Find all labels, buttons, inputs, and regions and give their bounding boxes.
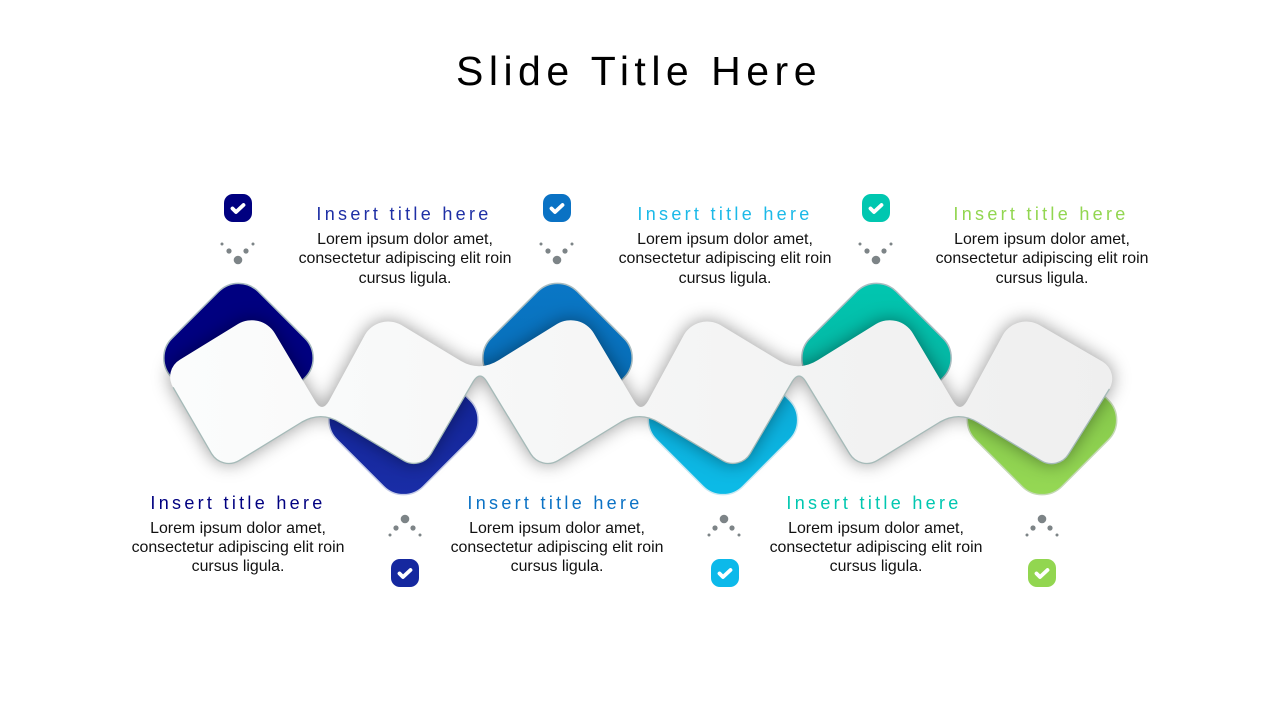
ribbon shadow xyxy=(170,320,1112,464)
text block step 1: cursus ligula. xyxy=(192,558,284,575)
icon: check badge teal xyxy=(862,194,890,222)
text block step 5: cursus ligula. xyxy=(830,558,922,575)
heading step 6: Insert title here xyxy=(953,204,1129,224)
text block step 5: consectetur adipiscing elit roin xyxy=(770,539,982,556)
text block step 3: consectetur adipiscing elit roin xyxy=(451,539,663,556)
step 3 back diamond: blue xyxy=(471,272,644,444)
text block step 2 xyxy=(299,204,511,287)
text block step 2: Lorem ipsum dolor amet, xyxy=(317,231,493,248)
text block step 3 xyxy=(451,493,663,575)
text block step 1 xyxy=(132,493,344,575)
text block step 1: Lorem ipsum dolor amet, xyxy=(150,520,326,537)
text block step 6 xyxy=(936,204,1148,287)
step 2 back diamond: dark blue xyxy=(317,334,490,506)
ribbon lower edge line xyxy=(173,376,1109,464)
text block step 2: cursus ligula. xyxy=(359,270,451,287)
zigzag white ribbon of six rounded panels xyxy=(170,320,1112,464)
step 6 back diamond: green xyxy=(956,334,1128,506)
text block step 3: Lorem ipsum dolor amet, xyxy=(469,520,645,537)
icon: check badge blue xyxy=(543,194,571,222)
text block step 4 xyxy=(619,204,831,287)
dots connector step 6 xyxy=(1026,515,1058,536)
text block step 6: Lorem ipsum dolor amet, xyxy=(954,231,1130,248)
dots connector step 4 xyxy=(708,515,740,536)
dots connector step 2 xyxy=(388,515,422,536)
dots connector step 5 xyxy=(858,242,892,264)
text block step 5: Lorem ipsum dolor amet, xyxy=(788,520,964,537)
heading step 5: Insert title here xyxy=(786,493,962,513)
heading step 2: Insert title here xyxy=(316,204,492,224)
step 4 back diamond: cyan xyxy=(637,334,809,506)
dots connector step 1 xyxy=(220,242,254,264)
title: Slide Title Here xyxy=(456,48,822,94)
text block step 6: cursus ligula. xyxy=(996,270,1088,287)
text block step 3: cursus ligula. xyxy=(511,558,603,575)
step 1 back diamond: navy xyxy=(152,272,325,444)
heading step 4: Insert title here xyxy=(637,204,813,224)
step 5 back diamond: teal xyxy=(790,272,963,444)
text block step 2: consectetur adipiscing elit roin xyxy=(299,250,511,267)
text block step 5 xyxy=(770,493,982,575)
text block step 4: Lorem ipsum dolor amet, xyxy=(637,231,813,248)
text block step 4: consectetur adipiscing elit roin xyxy=(619,250,831,267)
icon: check badge green xyxy=(1028,559,1056,587)
icon: check badge cyan xyxy=(711,559,739,587)
icon: check badge dark blue xyxy=(391,559,419,587)
text block step 6: consectetur adipiscing elit roin xyxy=(936,250,1148,267)
heading step 1: Insert title here xyxy=(150,493,326,513)
text block step 1: consectetur adipiscing elit roin xyxy=(132,539,344,556)
icon: check badge navy xyxy=(224,194,252,222)
heading step 3: Insert title here xyxy=(467,493,643,513)
dots connector step 3 xyxy=(540,242,574,264)
text block step 4: cursus ligula. xyxy=(679,270,771,287)
